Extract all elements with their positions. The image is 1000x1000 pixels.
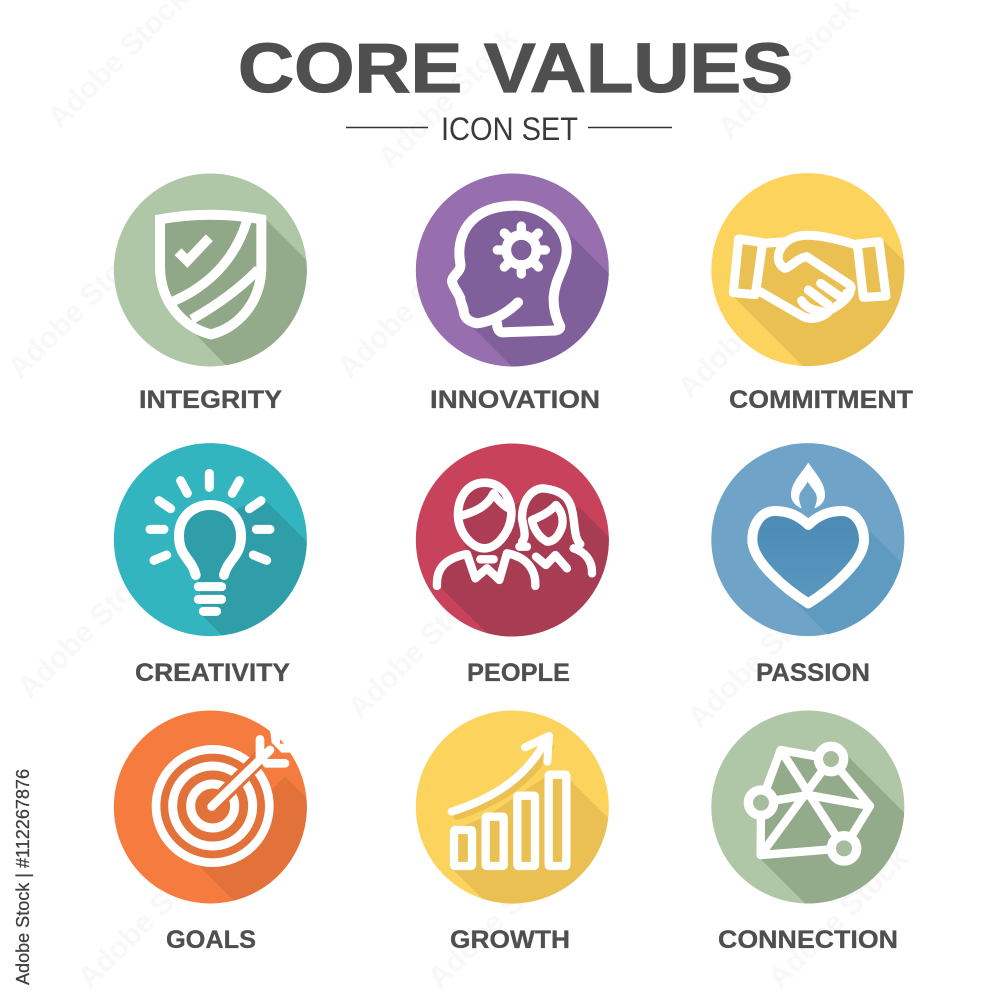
label: growth: GROWTH: [450, 926, 570, 954]
watermark pattern: Adobe Stock: [422, 842, 575, 995]
icon: innovation head with gear: [416, 174, 609, 366]
icon: passion heart with flame: [711, 443, 904, 636]
label: connection: CONNECTION: [718, 926, 898, 954]
watermark pattern: Adobe Stock: [332, 232, 485, 385]
icon: commitment handshake: [711, 173, 904, 366]
watermark pattern: Adobe Stock: [12, 552, 165, 705]
icon: integrity shield: [114, 174, 307, 366]
label: innovation: INNOVATION: [430, 386, 600, 414]
label: people: PEOPLE: [467, 659, 570, 687]
label: passion: PASSION: [756, 659, 870, 687]
label: integrity: INTEGRITY: [139, 386, 282, 414]
watermark pattern: Adobe Stock: [762, 842, 915, 995]
icon: creativity light bulb: [114, 443, 307, 636]
label: goals: GOALS: [166, 926, 256, 954]
stock credit text: Adobe Stock | #112267876: [13, 769, 33, 985]
watermark pattern: Adobe Stock: [342, 572, 495, 725]
watermark pattern: Adobe Stock: [672, 252, 825, 405]
label: creativity: CREATIVITY: [135, 659, 290, 687]
label: commitment: COMMITMENT: [729, 386, 913, 414]
icon: growth bar chart with arrow: [416, 710, 609, 904]
watermark pattern: Adobe Stock: [72, 842, 225, 995]
watermark pattern: Adobe Stock: [682, 582, 835, 735]
icon: people man and woman: [416, 444, 609, 636]
icon: connection network: [711, 710, 904, 904]
subtitle: icon set: ICON SET: [441, 111, 578, 147]
watermark pattern: Adobe Stock: [2, 232, 155, 385]
icon: goals target with arrow: [114, 710, 307, 904]
watermark pattern: Adobe Stock: [372, 22, 525, 175]
title: CORE VALUES: [238, 29, 793, 107]
